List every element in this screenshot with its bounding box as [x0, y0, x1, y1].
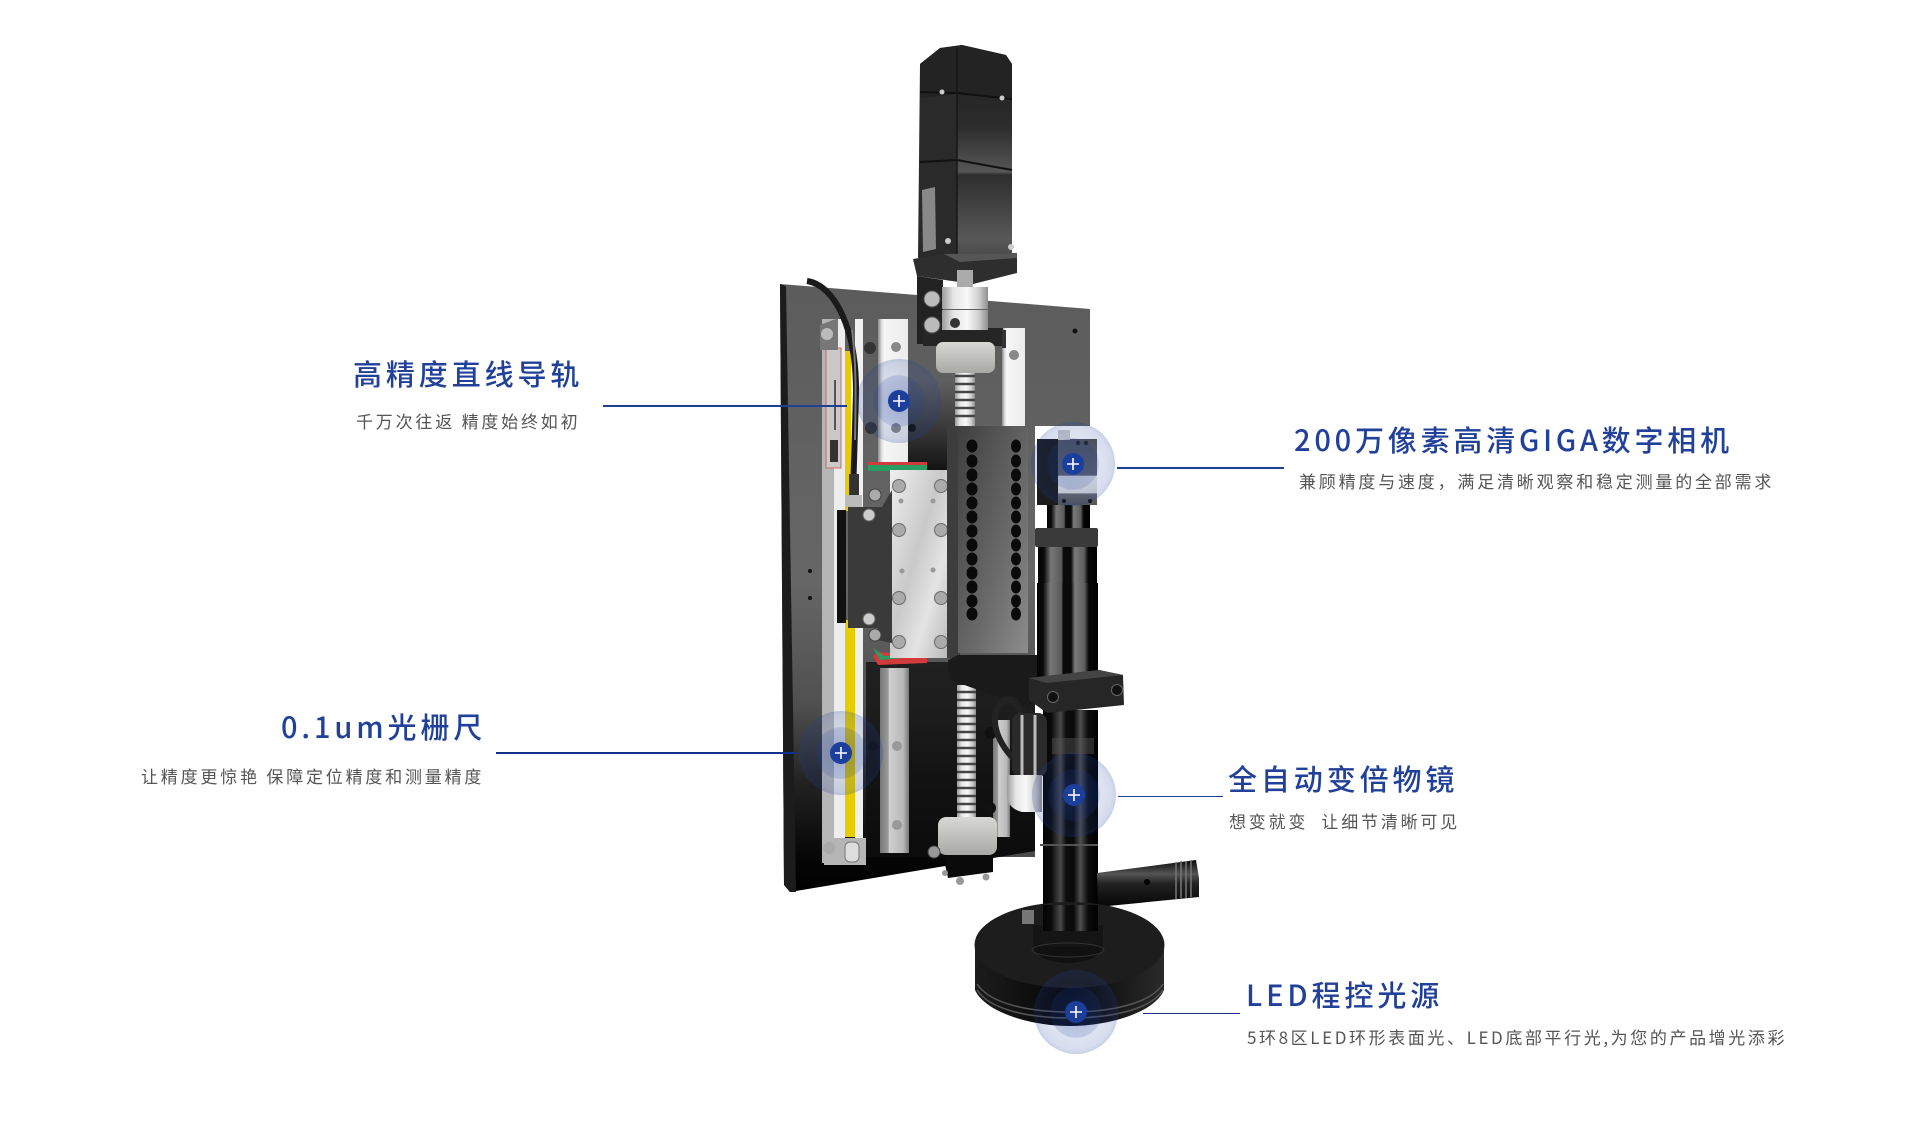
servo motor — [918, 45, 1014, 258]
marker: light source — [1034, 970, 1118, 1054]
marker: objective — [1032, 753, 1116, 837]
callout: GIGA camera — [1117, 418, 1774, 493]
ball screw — [955, 369, 976, 819]
callout: LED light source — [1143, 973, 1787, 1049]
heading: grating scale: 0.1um光栅尺 — [281, 705, 486, 747]
leader line: grating scale — [496, 752, 797, 754]
side cable connector — [995, 699, 1047, 812]
leader line: guide rail — [603, 405, 847, 407]
zoom objective column — [1035, 505, 1098, 932]
column clamp — [1029, 670, 1124, 713]
heading: camera: 200万像素高清GIGA数字相机 — [1294, 418, 1733, 460]
motor flange and bracket — [913, 253, 1017, 348]
mounting plate — [780, 284, 1090, 892]
linear guide rails — [864, 319, 1025, 853]
marker: guide rail — [857, 359, 941, 443]
screw bearing block — [928, 342, 997, 885]
heading: objective: 全自动变倍物镜 — [1228, 757, 1458, 799]
leader line: camera — [1117, 467, 1284, 468]
lens bracket — [948, 655, 1037, 708]
text: camera description: 兼顾精度与速度，满足清晰观察和稳定测量的全部需求 — [1299, 468, 1774, 493]
text: guide rail description: 千万次往返 精度始终如初 — [356, 408, 580, 433]
marker: grating scale — [799, 711, 883, 795]
callout: grating scale — [141, 705, 797, 788]
shaft coupling — [924, 270, 988, 333]
digital camera — [1037, 430, 1097, 505]
marker: camera — [1031, 422, 1115, 506]
text: grating scale description: 让精度更惊艳 保障定位精度和测量精度 — [141, 763, 484, 788]
perforated mounting plate — [947, 426, 1028, 658]
callout: zoom objective — [1118, 757, 1460, 833]
leader line: light source — [1143, 1013, 1240, 1014]
heading: light source: LED程控光源 — [1246, 973, 1443, 1015]
callout: high precision linear guide — [353, 352, 847, 433]
scale signal cable — [807, 281, 862, 507]
carriage slider — [868, 462, 960, 665]
optical grating scale — [820, 318, 866, 865]
text: objective description: 想变就变 让细节清晰可见 — [1229, 808, 1460, 833]
heading: guide rail: 高精度直线导轨 — [353, 352, 583, 394]
scale reader head — [837, 489, 892, 643]
LED ring light — [974, 902, 1164, 1026]
coaxial light tube — [1097, 860, 1199, 907]
text: light source description: 5环8区LED环形表面光、LED底部平行光,为您的产品增光添彩 — [1247, 1024, 1787, 1049]
leader line: objective — [1118, 796, 1223, 797]
